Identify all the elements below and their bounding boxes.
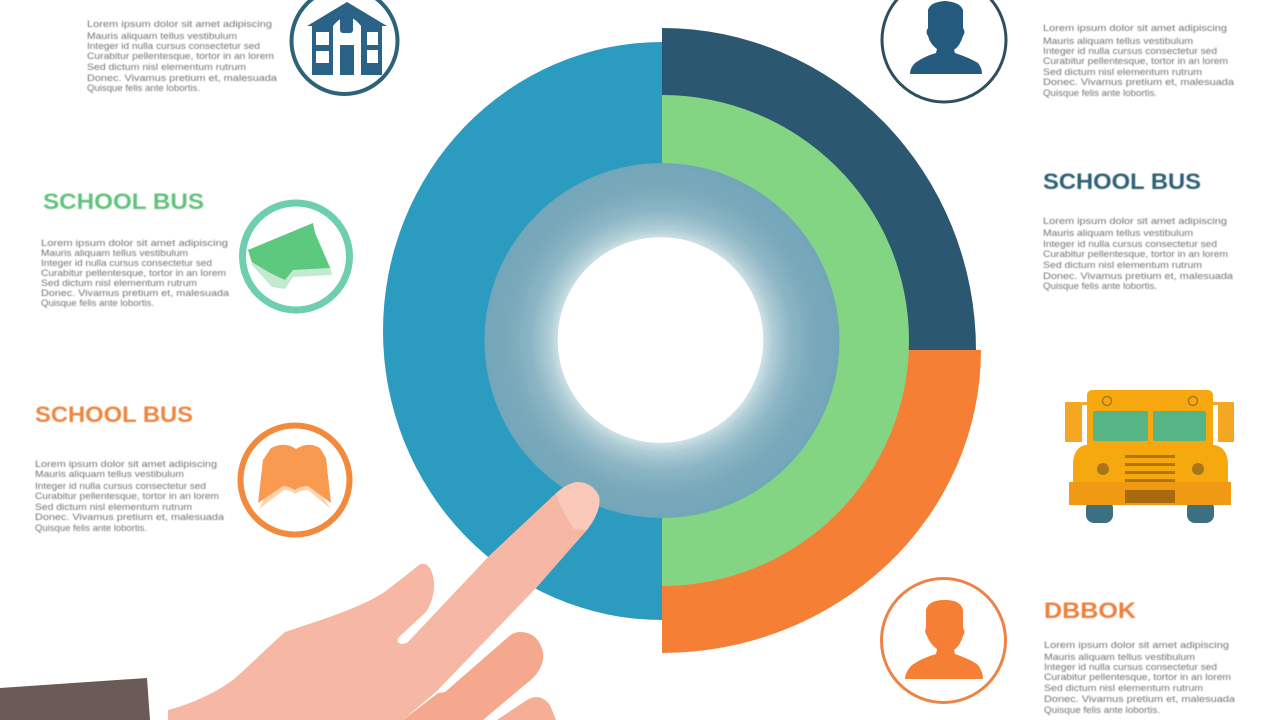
- text block: top left: Lorem ipsum dolor sit amet adipiscing: [87, 19, 272, 30]
- text block: top left: Mauris aliquam tellus vestibulum: [87, 31, 237, 42]
- panel: navy school bus section: [1043, 169, 1234, 292]
- text block: orange right: Lorem ipsum dolor sit amet adipiscing: [1044, 640, 1229, 651]
- text block: top right: Mauris aliquam tellus vestibulum: [1043, 36, 1193, 47]
- segment: green right half: [662, 95, 909, 586]
- text block: green section: Integer id nulla cursus consectetur sed: [41, 258, 212, 269]
- text block: green section: Quisque felis ante lobortis.: [41, 298, 154, 309]
- finger: middle: [403, 632, 543, 720]
- text block: navy section: Mauris aliquam tellus vestibulum: [1043, 228, 1193, 239]
- text block: top right: Quisque felis ante lobortis.: [1043, 88, 1157, 99]
- text block: top left: Sed dictum nisl elementum rutrum: [87, 62, 246, 73]
- text block: green section: Donec. Vivamus pretium et, malesuada: [41, 288, 230, 299]
- text block: top right: Curabitur pellentesque, tortor in an lorem: [1043, 56, 1228, 67]
- text block: green section: Lorem ipsum dolor sit amet adipiscing: [41, 238, 228, 249]
- center: white circle: [558, 237, 763, 443]
- heading: orange school bus: SCHOOL BUS: [35, 402, 193, 427]
- heading: green school bus: SCHOOL BUS: [43, 189, 204, 214]
- icon: yellow school bus: [1065, 390, 1234, 523]
- text block: green section: Sed dictum nisl elementum rutrum: [41, 278, 197, 289]
- panel: top left text and house icon: [87, 0, 398, 94]
- palm, thumb and index finger: [168, 482, 600, 720]
- text block: top right: Sed dictum nisl elementum rutrum: [1043, 67, 1202, 78]
- text block: orange right: Integer id nulla cursus consectetur sed: [1044, 662, 1217, 673]
- icon: school house: [292, 0, 398, 94]
- icon: orange open book: [240, 426, 350, 534]
- icon: orange person: [882, 578, 1006, 702]
- segment: blue left half: [383, 42, 662, 620]
- ring: inner steel gradient disc: [484, 163, 840, 518]
- text block: navy section: Quisque felis ante lobortis.: [1043, 281, 1157, 292]
- text block: orange section: [35, 459, 225, 534]
- heading: navy school bus: SCHOOL BUS: [1043, 169, 1201, 194]
- text block: orange right: Donec. Vivamus pretium et, malesuada: [1044, 694, 1236, 705]
- text block: top right: Lorem ipsum dolor sit amet adipiscing: [1043, 23, 1227, 34]
- heading: dbbok: DBBOK: [1044, 598, 1136, 623]
- text block: orange section: Integer id nulla cursus consectetur sed: [35, 481, 206, 492]
- text block: orange right: Mauris aliquam tellus vestibulum: [1044, 652, 1195, 663]
- chart: central segmented donut: [383, 28, 981, 653]
- text block: orange section: Mauris aliquam tellus vestibulum: [35, 469, 184, 480]
- panel: green school bus section: [41, 189, 350, 310]
- illustration: pointing hand: [0, 482, 600, 720]
- panel: top right text and person icon: [882, 0, 1235, 102]
- text block: navy section: Lorem ipsum dolor sit amet adipiscing: [1043, 216, 1227, 227]
- text block: navy section: Curabitur pellentesque, tortor in an lorem: [1043, 249, 1228, 260]
- finger: ring: [497, 697, 556, 720]
- icon: green open book: [242, 203, 350, 310]
- text block: orange section: Curabitur pellentesque, tortor in an lorem: [35, 491, 219, 502]
- text block: orange right: [1044, 640, 1236, 716]
- text block: orange right: Sed dictum nisl elementum rutrum: [1044, 683, 1203, 694]
- text block: orange section: Quisque felis ante lobortis.: [35, 523, 147, 534]
- text block: top left: Integer id nulla cursus consectetur sed: [87, 41, 260, 52]
- panel: orange school bus section: [35, 402, 350, 534]
- text block: navy section: Donec. Vivamus pretium et, malesuada: [1043, 271, 1234, 282]
- text block: orange right: Curabitur pellentesque, tortor in an lorem: [1044, 672, 1231, 683]
- sleeve: [0, 678, 150, 720]
- segment: orange lower right: [662, 350, 981, 653]
- text block: top left: [87, 19, 278, 94]
- text block: top left: Donec. Vivamus pretium et, malesuada: [87, 73, 278, 84]
- text block: top right: Donec. Vivamus pretium et, malesuada: [1043, 77, 1235, 88]
- icon: navy person: [882, 0, 1006, 102]
- text block: top left: Quisque felis ante lobortis.: [87, 83, 200, 94]
- text block: green section: Mauris aliquam tellus vestibulum: [41, 248, 188, 259]
- text block: top right: [1043, 23, 1235, 99]
- text block: top left: Curabitur pellentesque, tortor in an lorem: [87, 51, 274, 62]
- text block: orange section: Sed dictum nisl elementum rutrum: [35, 502, 192, 513]
- text block: green section: [41, 238, 230, 309]
- panel: orange dbbok section: [882, 578, 1236, 716]
- fingertip highlight: [556, 482, 600, 530]
- text block: orange section: Lorem ipsum dolor sit amet adipiscing: [35, 459, 217, 470]
- text block: top right: Integer id nulla cursus consectetur sed: [1043, 46, 1217, 57]
- text block: navy section: Integer id nulla cursus consectetur sed: [1043, 239, 1217, 250]
- text block: navy section: Sed dictum nisl elementum rutrum: [1043, 260, 1202, 271]
- text block: orange right: Quisque felis ante lobortis.: [1044, 705, 1160, 716]
- segment: navy upper right: [662, 28, 976, 350]
- text block: green section: Curabitur pellentesque, tortor in an lorem: [41, 268, 226, 279]
- text block: navy section: [1043, 216, 1234, 292]
- text block: orange section: Donec. Vivamus pretium et, malesuada: [35, 512, 225, 523]
